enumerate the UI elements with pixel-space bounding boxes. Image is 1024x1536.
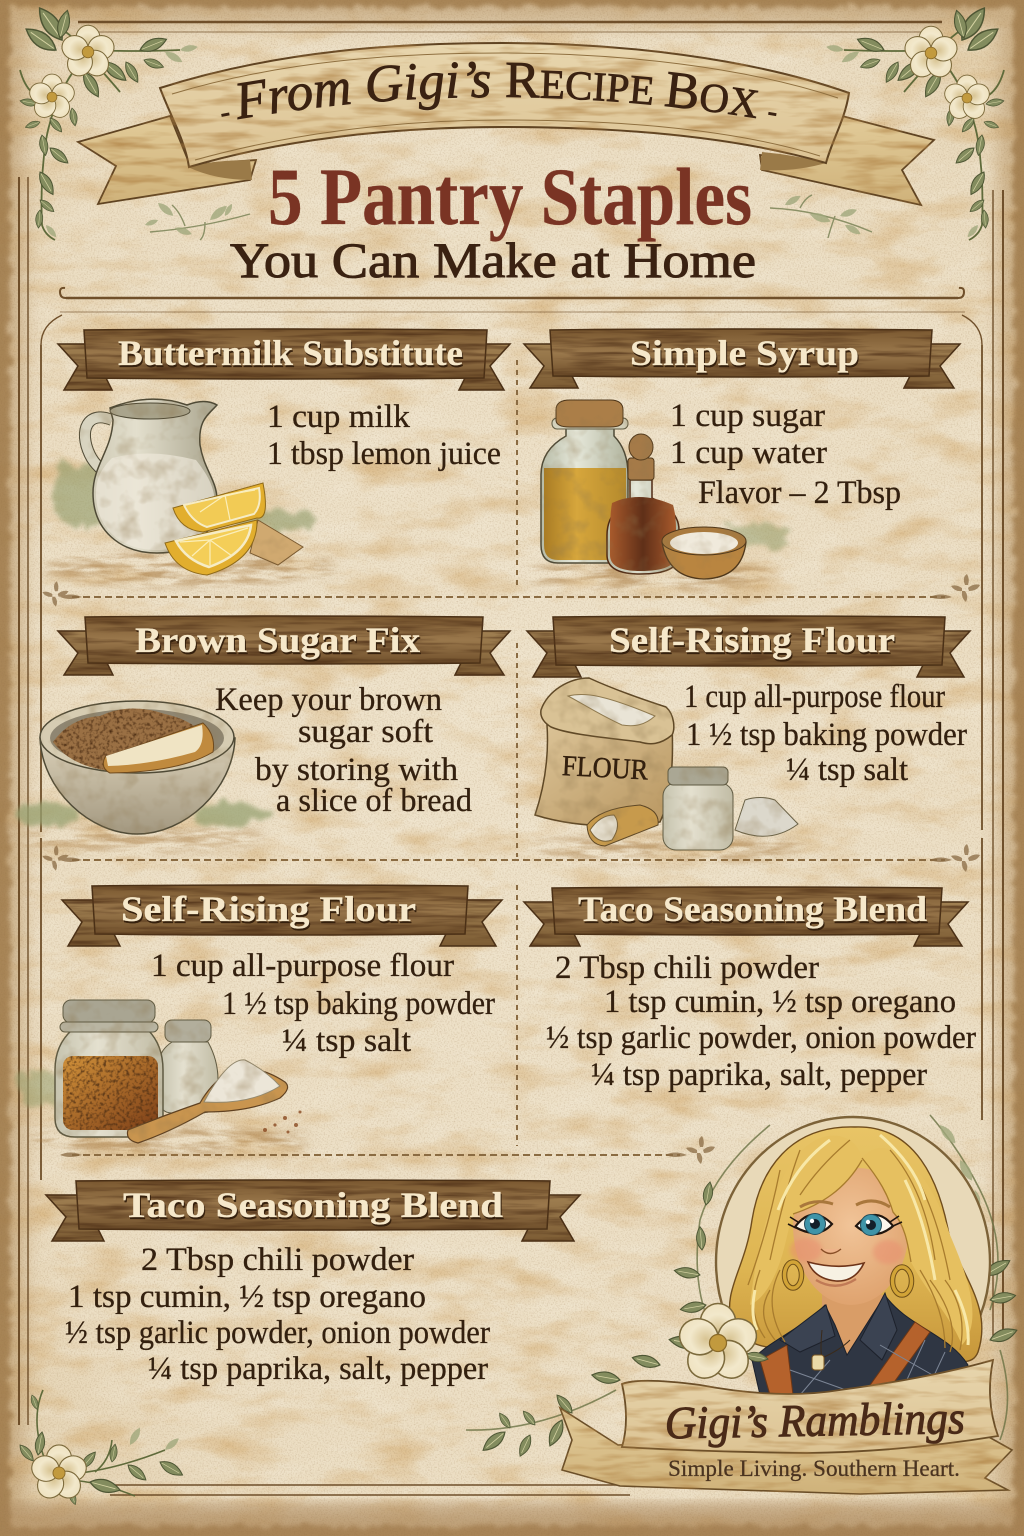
icon: flour sack, jar and scoop <box>535 678 805 862</box>
ribbon <box>58 616 510 675</box>
oval frame <box>716 1117 990 1407</box>
ribbon: Self-Rising Flour <box>121 889 416 929</box>
panel: taco seasoning blend (bottom) <box>46 1180 580 1387</box>
corner florals: top right <box>826 4 1005 240</box>
ingredients: ¼ tsp salt <box>786 752 908 788</box>
panel: buttermilk substitute <box>45 329 510 586</box>
ingredients <box>546 950 976 1093</box>
upper ribbon body <box>622 1360 998 1453</box>
description: by storing with <box>255 752 459 788</box>
ingredients: ½ tsp garlic powder, onion powder <box>65 1315 490 1351</box>
banner heading text: - From Gigi’s RECIPE BOX - <box>221 62 776 120</box>
ribbon: Buttermilk Substitute <box>118 333 463 373</box>
subtitle: You Can Make at Home <box>230 232 756 288</box>
ingredients: 1 tbsp lemon juice <box>267 436 501 472</box>
ribbon: Simple Syrup <box>630 333 859 373</box>
ingredients <box>267 399 501 472</box>
ribbon <box>46 1180 580 1241</box>
corner florals: top left <box>19 4 198 240</box>
logo banner <box>560 1360 1012 1494</box>
panel: self-rising flour (with jars) <box>20 885 502 1154</box>
suspenders <box>760 1322 930 1395</box>
ribbon <box>527 616 970 677</box>
ingredients <box>65 1242 490 1387</box>
banner left tail <box>78 116 256 204</box>
portrait of Gigi <box>716 1117 990 1407</box>
description: Keep your brown <box>215 682 442 718</box>
lower ribbon strip <box>560 1408 1012 1494</box>
ingredients: 1 cup all-purpose flour <box>684 679 945 715</box>
ingredients: ¼ tsp salt <box>282 1023 411 1059</box>
banner fold shadows <box>188 152 826 180</box>
ingredients: ¼ tsp paprika, salt, pepper <box>591 1057 927 1093</box>
ingredients: ¼ tsp paprika, salt, pepper <box>148 1351 488 1387</box>
title banner <box>76 42 936 228</box>
eyes <box>788 1201 902 1236</box>
corner floral: bottom left <box>17 1390 185 1506</box>
sprig: right of title <box>770 193 872 238</box>
ingredients: 1 cup milk <box>267 399 411 435</box>
divider ornaments <box>42 574 980 1164</box>
sprig: left of title <box>144 200 250 240</box>
ribbon: Taco Seasoning Blend <box>123 1185 503 1225</box>
banner right tail <box>760 116 934 205</box>
ingredients: 1 ½ tsp baking powder <box>686 717 967 753</box>
ingredients: ½ tsp garlic powder, onion powder <box>546 1020 976 1056</box>
ribbon: Brown Sugar Fix <box>135 620 420 660</box>
ribbon <box>524 329 960 388</box>
ribbon: Taco Seasoning Blend <box>578 889 927 929</box>
ingredients: 2 Tbsp chili powder <box>555 950 819 986</box>
ingredients: Flavor – 2 Tbsp <box>698 475 901 511</box>
face <box>793 1168 909 1305</box>
panel: taco seasoning blend (right) <box>524 887 976 1093</box>
logo flower <box>668 1303 769 1385</box>
panel: self-rising flour (with sack) <box>527 616 970 862</box>
brand name: Gigi’s Ramblings <box>664 1392 965 1448</box>
icon: bowl with brown sugar and bread <box>15 701 274 852</box>
hair back <box>730 1127 982 1362</box>
ribbon <box>62 885 502 946</box>
shirt <box>752 1295 968 1395</box>
icon: milk pitcher with lemons <box>45 399 335 586</box>
tagline: Simple Living. Southern Heart. <box>668 1456 960 1481</box>
ingredients: 1 tsp cumin, ½ tsp oregano <box>604 984 956 1020</box>
hair front <box>750 1136 862 1305</box>
panel: brown sugar fix <box>15 616 510 852</box>
icon: syrup bottles and sugar bowl <box>525 400 794 589</box>
earrings <box>784 1262 912 1295</box>
panel: simple syrup <box>524 329 960 589</box>
icon: spice jars and scoop <box>20 1000 310 1154</box>
description: sugar soft <box>298 714 433 750</box>
nose and smile <box>808 1249 864 1286</box>
ingredients: 1 cup all-purpose flour <box>151 948 454 984</box>
banner main body <box>160 43 849 167</box>
ingredients: 1 cup sugar <box>670 398 825 434</box>
ribbon: Self-Rising Flour <box>609 620 895 660</box>
ingredients <box>670 398 901 511</box>
sack label: FLOUR <box>561 750 649 787</box>
main title: 5 Pantry Staples <box>268 151 752 242</box>
dashed dividers <box>72 360 945 1155</box>
neck <box>822 1290 886 1372</box>
ingredients: 2 Tbsp chili powder <box>141 1242 414 1278</box>
necklace <box>812 1330 850 1370</box>
ingredients: 1 ½ tsp baking powder <box>222 986 495 1022</box>
ingredients: 1 cup water <box>670 435 827 471</box>
ingredients <box>151 948 495 1059</box>
ribbon <box>58 329 510 390</box>
description: a slice of bread <box>276 783 472 819</box>
description <box>215 682 472 819</box>
logo foliage <box>466 1115 1019 1458</box>
ingredients: 1 tsp cumin, ½ tsp oregano <box>68 1279 426 1315</box>
ingredients <box>684 679 967 788</box>
ribbon <box>524 887 968 946</box>
